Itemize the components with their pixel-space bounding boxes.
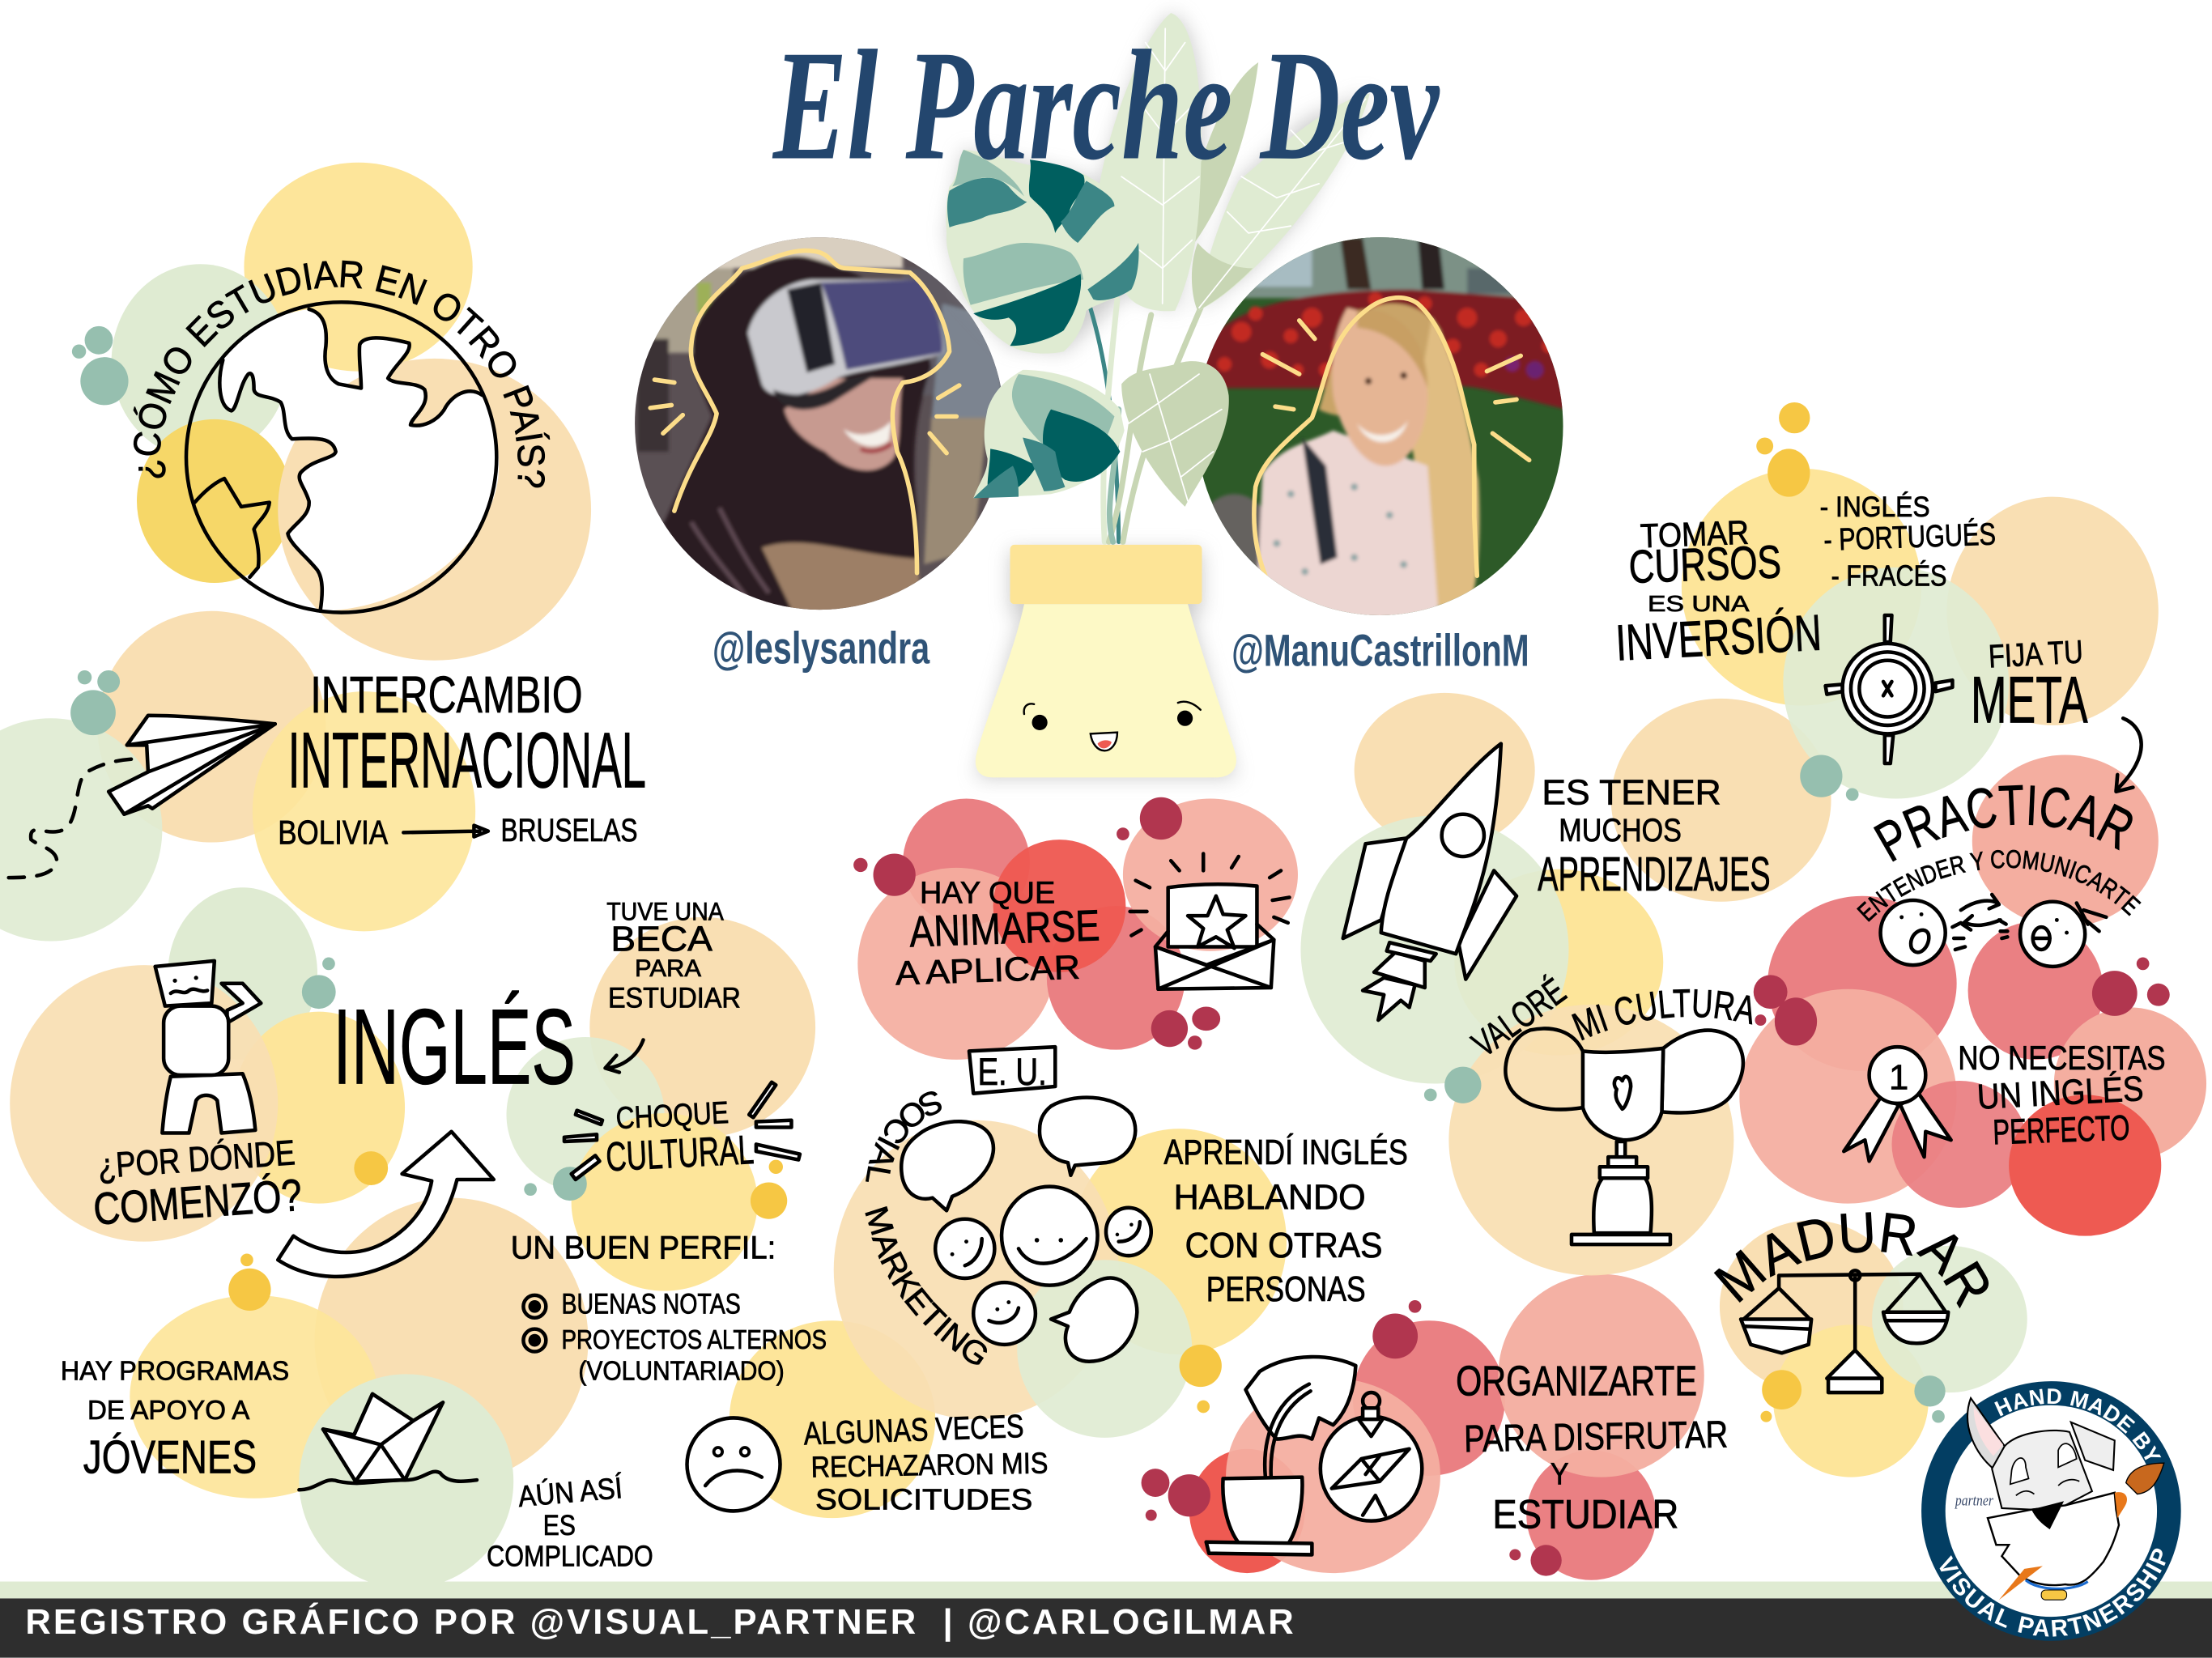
- title: El Parche Dev: [772, 19, 1440, 193]
- panel: madurar: [1713, 1212, 1989, 1394]
- heading: ingles: INGLÉS: [333, 987, 576, 1107]
- rays around manu: [1262, 321, 1529, 460]
- label: e.u.: E. U.: [977, 1050, 1047, 1093]
- programas de apoyo: DE APOYO A: [87, 1396, 250, 1426]
- buen perfil list: [511, 1231, 827, 1386]
- panel: intercambio internacional: [0, 665, 646, 878]
- text block: fija tu meta: [1971, 634, 2088, 737]
- note: beca: PARA: [635, 955, 701, 982]
- text block: Y: [1551, 1456, 1568, 1491]
- heading: internacional: INTERNACIONAL: [287, 716, 646, 805]
- footer band: [0, 1582, 2212, 1658]
- heading: practicar: PRACTICAR: [1874, 785, 2133, 861]
- icon: rocket: [1343, 744, 1516, 1020]
- programas de apoyo: HAY PROGRAMAS: [61, 1356, 289, 1386]
- panel: social marketing: [865, 1044, 1408, 1365]
- icon: small arrow: [605, 1039, 644, 1073]
- panel: aprendizajes: [1343, 744, 1771, 1020]
- icon: target: [1826, 615, 1952, 763]
- ring text top: HAND MADE BY: [1994, 1388, 2162, 1460]
- badge: hand made by visual partnership: [1921, 1381, 2181, 1641]
- text block: no necesitas: UN INGLÉS: [1976, 1069, 2145, 1117]
- text block: [1456, 1358, 1728, 1537]
- top monstera leaf: [946, 150, 1139, 354]
- blobs: intercambio cluster: [0, 611, 475, 942]
- language list: - INGLÉS: [1820, 491, 1930, 523]
- note: aun asi: ES: [543, 1510, 576, 1541]
- icon: big curved arrow: [278, 1132, 494, 1277]
- text block: inversion: CURSOS: [1628, 536, 1782, 593]
- note: aun asi: COMPLICADO: [487, 1539, 653, 1572]
- text block: no necesitas: NO NECESITAS: [1958, 1039, 2166, 1077]
- icon: envelope with star: [1130, 853, 1290, 989]
- blobs: rocket and trophy cluster: [1300, 693, 1831, 1275]
- note: beca: [606, 897, 741, 1014]
- icon: dog mascot: [1967, 1398, 2164, 1600]
- text block: inversion: TOMAR: [1640, 513, 1750, 555]
- blobs: ingles cluster: [10, 887, 815, 1588]
- arc heading: ¿CÓMO ESTUDIAR EN OTRO PAÍS?: [133, 261, 551, 487]
- panel: globe question: [133, 261, 551, 614]
- bullet: proyectos alternos: PROYECTOS ALTERNOS: [561, 1325, 827, 1355]
- icon: compass: [1321, 1392, 1422, 1521]
- photo: manu outdoors: [1203, 237, 1563, 615]
- text block: no necesitas: PERFECTO: [1993, 1109, 2130, 1152]
- blobs: meta cluster: [1682, 402, 2159, 801]
- heading: intercambio: INTERCAMBIO: [310, 665, 583, 724]
- text block: [895, 875, 1100, 993]
- plant stems: [1087, 300, 1202, 542]
- lower monstera leaf: [973, 370, 1125, 498]
- panel: hay que animarse: [895, 853, 1290, 993]
- blobs: practicar cluster: [1739, 755, 2206, 1236]
- note: beca: TUVE UNA: [606, 897, 724, 925]
- note: rechazaron: ALGUNAS VECES: [803, 1409, 1024, 1452]
- text block: ESTUDIAR: [1492, 1490, 1678, 1537]
- language list: - PORTUGUÉS: [1823, 517, 1997, 558]
- panel: valore mi cultura: [1465, 970, 1752, 1247]
- speech bubbles: [901, 1098, 1137, 1362]
- text block: APRENDIZAJES: [1538, 847, 1771, 901]
- choque cultural: CHOQUE: [615, 1095, 730, 1136]
- icon: trophy: [1505, 1028, 1743, 1244]
- text block: inversion: INVERSIÓN: [1614, 605, 1823, 672]
- note: beca: ESTUDIAR: [608, 982, 741, 1014]
- text block: A APLICAR: [895, 948, 1081, 993]
- small partner logo: partner: [1954, 1492, 1993, 1509]
- text block: ES TENER: [1542, 774, 1721, 813]
- icon: paper boat: [299, 1394, 477, 1490]
- pot body: [976, 604, 1236, 777]
- curved text: MI CULTURA: [1571, 989, 1752, 1041]
- curved subheading: ENTENDER Y COMUNICARTE: [1857, 850, 2142, 922]
- footer credit: REGISTRO GRÁFICO POR @VISUAL_PARTNER | @CARLOGILMAR: [25, 1601, 1294, 1643]
- language list: - FRACÉS: [1831, 559, 1946, 592]
- buen perfil list: UN BUEN PERFIL:: [511, 1231, 776, 1266]
- note: aun asi: [487, 1471, 653, 1572]
- text block: ANIMARSE: [908, 901, 1100, 956]
- question: por donde comenzo: [91, 1133, 304, 1235]
- text block: aprendi ingles: APRENDÍ INGLÉS: [1163, 1133, 1408, 1172]
- icon: sad face: [687, 1418, 781, 1511]
- text block: [1538, 774, 1771, 901]
- text block: aprendi ingles: CON OTRAS: [1185, 1226, 1383, 1265]
- back dark leaf: [1174, 62, 1258, 258]
- text block: inversion: [1614, 513, 1823, 672]
- smiling faces: [935, 1187, 1151, 1345]
- pot rim: [1010, 545, 1202, 604]
- curved text: VALORÉ: [1465, 970, 1573, 1065]
- icon: worried character: [155, 961, 261, 1133]
- note: rechazaron: SOLICITUDES: [815, 1483, 1032, 1516]
- language list: [1820, 491, 1997, 592]
- icon: potted leaf: [1206, 1357, 1355, 1554]
- choque cultural: CULTURAL: [605, 1126, 755, 1180]
- route: bolivia to bruselas: [278, 813, 638, 851]
- text block: fija tu meta: FIJA TU: [1988, 634, 2084, 674]
- handle: lesly: @leslysandra: [713, 623, 930, 673]
- curved label: social marketing: SOCIAL MARKETING: [865, 1091, 987, 1365]
- text block: ORGANIZARTE: [1456, 1358, 1697, 1405]
- icon: globe: [186, 302, 499, 613]
- choque cultural: [564, 1082, 800, 1180]
- icon: medal: [1844, 1047, 1951, 1161]
- tall centre leaf: [1098, 13, 1202, 311]
- curved heading: MADURAR: [1713, 1212, 1989, 1308]
- pot face: [1024, 702, 1201, 750]
- note: rechazaron: RECHAZARON MIS: [810, 1447, 1049, 1484]
- heart leaf: [1121, 361, 1229, 507]
- question: por donde comenzo: COMENZÓ?: [91, 1170, 304, 1235]
- blobs: social marketing cluster: [730, 1120, 1287, 1518]
- programas de apoyo: [61, 1356, 289, 1483]
- yellow outline around figure: [674, 251, 950, 573]
- text block: MUCHOS: [1559, 813, 1682, 848]
- handle: manu: @ManuCastrillonM: [1231, 626, 1529, 676]
- icon: paper plane: [0, 716, 275, 878]
- text block: fija tu meta: META: [1971, 663, 2088, 737]
- panel: practicar: [1842, 785, 2166, 1163]
- bullet: proyectos alternos: [523, 1325, 827, 1386]
- text block: HAY QUE: [920, 875, 1055, 910]
- bullet: proyectos alternos: (VOLUNTARIADO): [578, 1356, 785, 1386]
- blobs: globe cluster: [72, 163, 591, 661]
- route: bolivia to bruselas: BRUSELAS: [501, 813, 638, 848]
- rays around lesly: [650, 380, 959, 453]
- text block: aprendi ingles: PERSONAS: [1206, 1270, 1366, 1309]
- note: rechazaron: [803, 1409, 1049, 1516]
- ring text bottom: VISUAL PARTNERSHIP: [1940, 1548, 2166, 1637]
- text block: no necesitas: [1958, 1039, 2166, 1152]
- potted plant with face: [946, 13, 1370, 777]
- blobs: animarse cluster: [853, 797, 1298, 1060]
- photo: lesly with VR headset: [635, 237, 1001, 610]
- note: beca: BECA: [610, 920, 713, 959]
- text block: aprendi ingles: [1163, 1133, 1408, 1309]
- blobs: madurar cluster: [1720, 1221, 2027, 1477]
- panel: organizarte: [1206, 1357, 1728, 1554]
- plant shadow: [946, 13, 1370, 777]
- icon: two talking faces: [1881, 895, 2106, 967]
- icon: medal: 1: [1889, 1058, 1908, 1097]
- text block: inversion: ES UNA: [1648, 591, 1750, 616]
- curved text: [1465, 970, 1752, 1065]
- icon: curved arrow down: [2116, 718, 2142, 792]
- text block: PARA DISFRUTAR: [1464, 1413, 1729, 1460]
- yellow outline around figure: [1254, 298, 1477, 576]
- route: bolivia to bruselas: BOLIVIA: [278, 813, 388, 851]
- note: aun asi: AÚN ASÍ: [517, 1471, 624, 1513]
- icon: balance scale: [1741, 1270, 1948, 1392]
- panel: ingles: [61, 897, 1049, 1572]
- panel: tomar cursos: [1614, 491, 2142, 792]
- question: por donde comenzo: ¿POR DÓNDE: [96, 1133, 296, 1186]
- bullet: buenas notas: BUENAS NOTAS: [561, 1288, 741, 1320]
- blobs: organizarte cluster: [1142, 1274, 1704, 1580]
- text block: aprendi ingles: HABLANDO: [1174, 1179, 1366, 1218]
- programas de apoyo: JÓVENES: [83, 1431, 257, 1483]
- right leaf: [1192, 93, 1370, 311]
- bullet: buenas notas: [523, 1288, 741, 1320]
